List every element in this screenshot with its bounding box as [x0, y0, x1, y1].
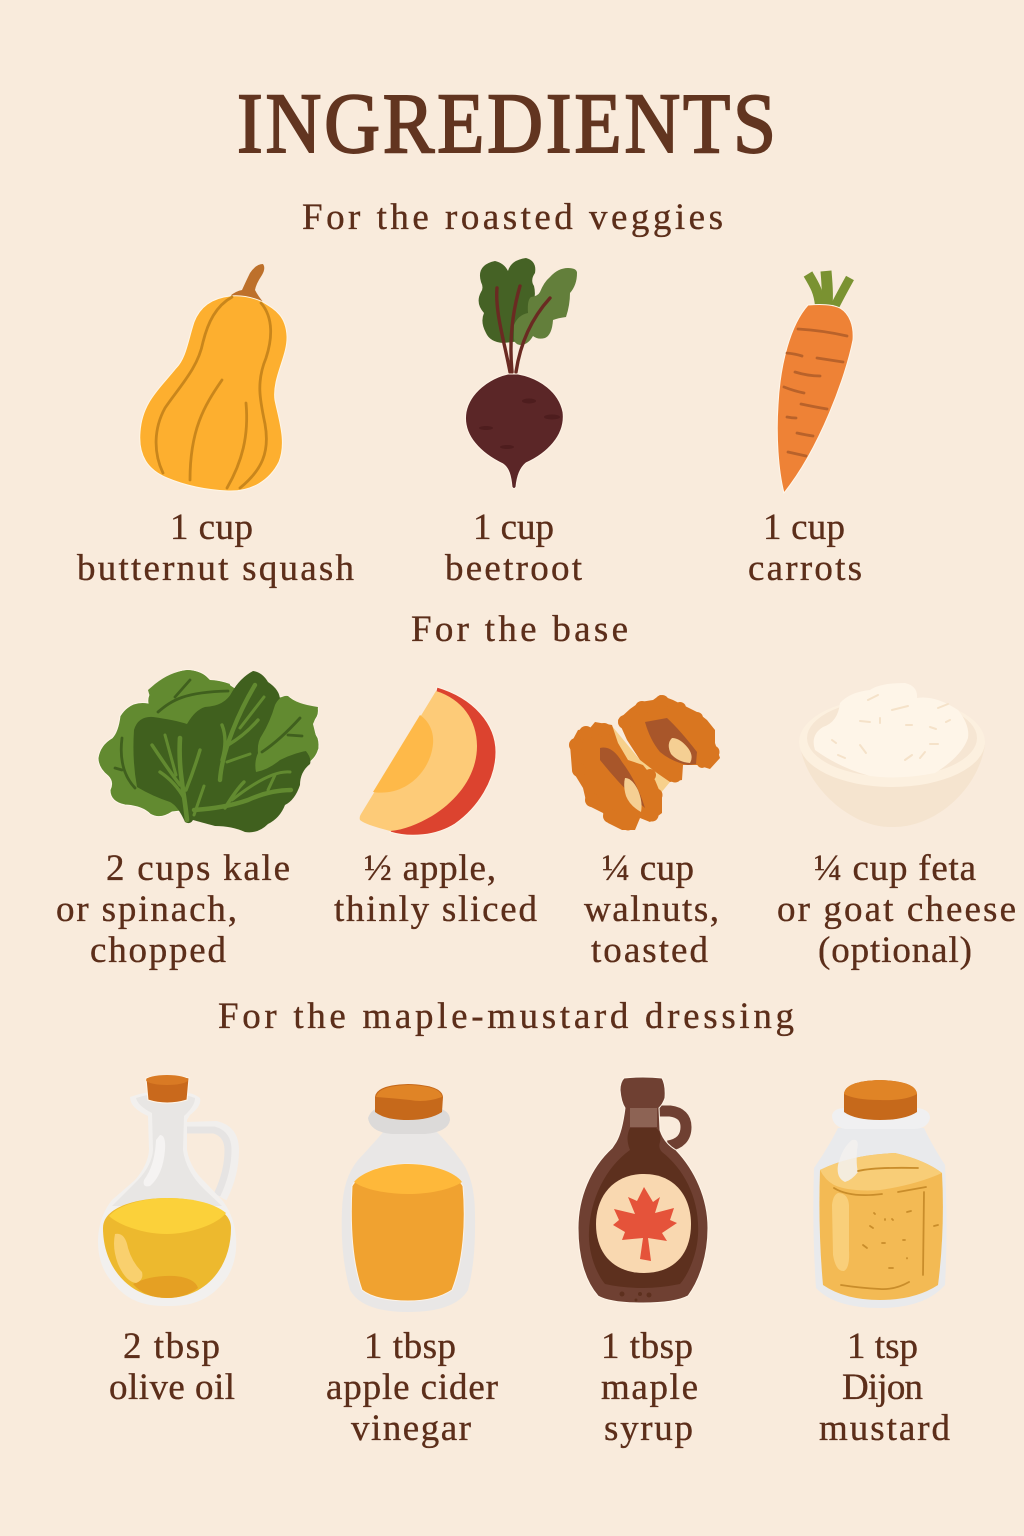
label: beetroot: beetroot — [445, 548, 583, 589]
label: walnuts: ¼ cup — [602, 848, 694, 889]
item: kale — [56, 670, 319, 971]
label: beetroot — [445, 507, 583, 589]
label: kale: chopped — [90, 930, 226, 971]
label: butternut squash — [77, 507, 354, 589]
item: apple — [334, 687, 538, 930]
label: apple cider vinegar — [326, 1326, 498, 1449]
label: apple: ½ apple, — [364, 848, 496, 889]
label: feta: or goat cheese — [777, 889, 1016, 930]
item: apple cider vinegar — [326, 1084, 498, 1449]
label: kale — [56, 848, 290, 971]
item: maple syrup — [578, 1077, 708, 1449]
icon: walnut — [569, 695, 720, 830]
label: walnuts: walnuts, — [584, 889, 719, 930]
label: Dijon mustard: 1 tsp — [847, 1326, 918, 1367]
icon: kale leaves — [98, 670, 319, 832]
label: butternut squash: butternut squash — [77, 548, 354, 589]
icon: mustard jar — [813, 1080, 946, 1308]
icon: butternut squash — [140, 264, 287, 491]
label: Dijon mustard: mustard — [819, 1408, 950, 1449]
label: carrots: carrots — [748, 548, 862, 589]
item: butternut squash — [77, 264, 354, 589]
item: beetroot — [445, 258, 583, 589]
label: feta: ¼ cup feta — [814, 848, 976, 889]
label: maple syrup: maple — [601, 1367, 698, 1408]
label: carrots: 1 cup — [763, 507, 845, 548]
heading: base: For the base — [411, 609, 628, 650]
label: kale: or spinach, — [56, 889, 237, 930]
icon: oil cruet — [98, 1075, 236, 1306]
icon: syrup bottle — [578, 1077, 708, 1303]
label: butternut squash: 1 cup — [170, 507, 253, 548]
label: feta: (optional) — [818, 930, 972, 971]
label: olive oil — [109, 1326, 235, 1408]
icon: vinegar bottle — [342, 1084, 475, 1312]
label: kale: 2 cups kale — [106, 848, 290, 889]
label: maple syrup — [601, 1326, 698, 1449]
label: walnuts — [584, 848, 719, 971]
label: apple cider vinegar: vinegar — [351, 1408, 471, 1449]
item: feta — [777, 683, 1016, 971]
label: beetroot: 1 cup — [473, 507, 554, 548]
label: apple cider vinegar: 1 tbsp — [364, 1326, 456, 1367]
label: olive oil: 2 tbsp — [123, 1326, 220, 1367]
label: apple: thinly sliced — [334, 889, 538, 930]
label: feta — [777, 848, 1016, 971]
icon: carrot — [777, 271, 853, 493]
label: apple cider vinegar: apple cider — [326, 1367, 498, 1408]
label: apple — [334, 848, 538, 930]
label: Dijon mustard: Dijon — [842, 1367, 923, 1408]
label: olive oil: olive oil — [109, 1367, 235, 1408]
item: carrots — [748, 271, 862, 589]
item: olive oil — [98, 1075, 236, 1408]
heading: dressing: For the maple-mustard dressing — [218, 996, 794, 1037]
icon: apple slice — [360, 687, 496, 835]
label: maple syrup: syrup — [604, 1408, 693, 1449]
icon: bowl of cheese — [799, 683, 985, 827]
item: walnuts — [569, 695, 720, 971]
title: INGREDIENTS — [237, 75, 776, 171]
label: walnuts: toasted — [591, 930, 708, 971]
label: carrots — [748, 507, 862, 589]
heading: roasted veggies: For the roasted veggies — [302, 197, 723, 238]
icon: beetroot — [465, 258, 577, 488]
label: Dijon mustard — [819, 1326, 950, 1449]
label: maple syrup: 1 tbsp — [601, 1326, 693, 1367]
item: Dijon mustard — [813, 1080, 950, 1449]
